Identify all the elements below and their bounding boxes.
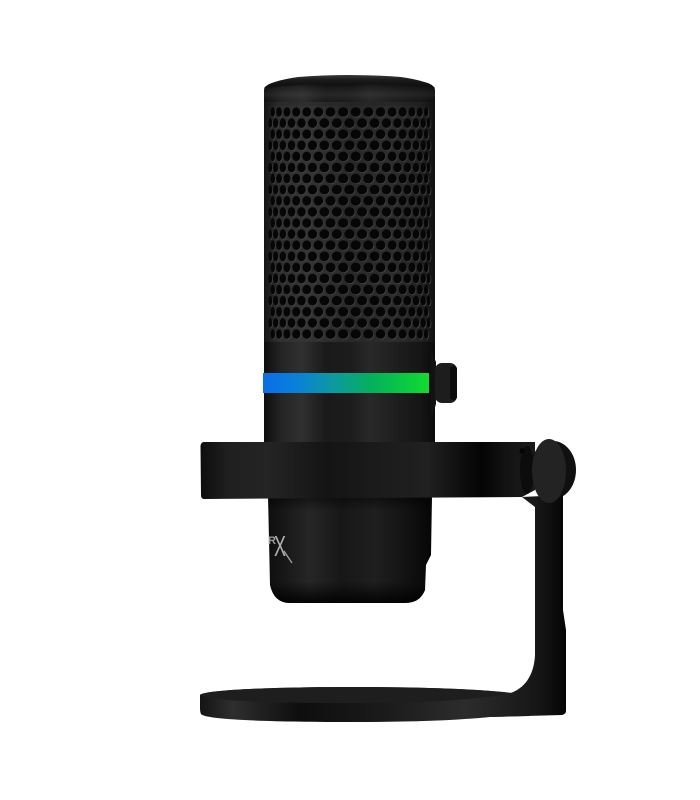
base disc [200,687,530,722]
grille panel [264,102,435,342]
stand base and arm [200,495,566,722]
top collar [264,84,435,106]
lower cup [268,495,432,603]
top cap [264,75,435,88]
microphone body [263,75,457,603]
gain knob [431,350,457,414]
LED light band [263,373,429,393]
pivot joint [520,439,576,503]
grille holes [268,107,431,340]
base top surface [200,687,512,703]
shock mount ring [200,439,576,503]
logo: R [268,535,276,547]
vertical arm [490,495,566,717]
upper body [264,82,435,445]
logo [268,531,292,563]
logo: X [274,531,286,563]
